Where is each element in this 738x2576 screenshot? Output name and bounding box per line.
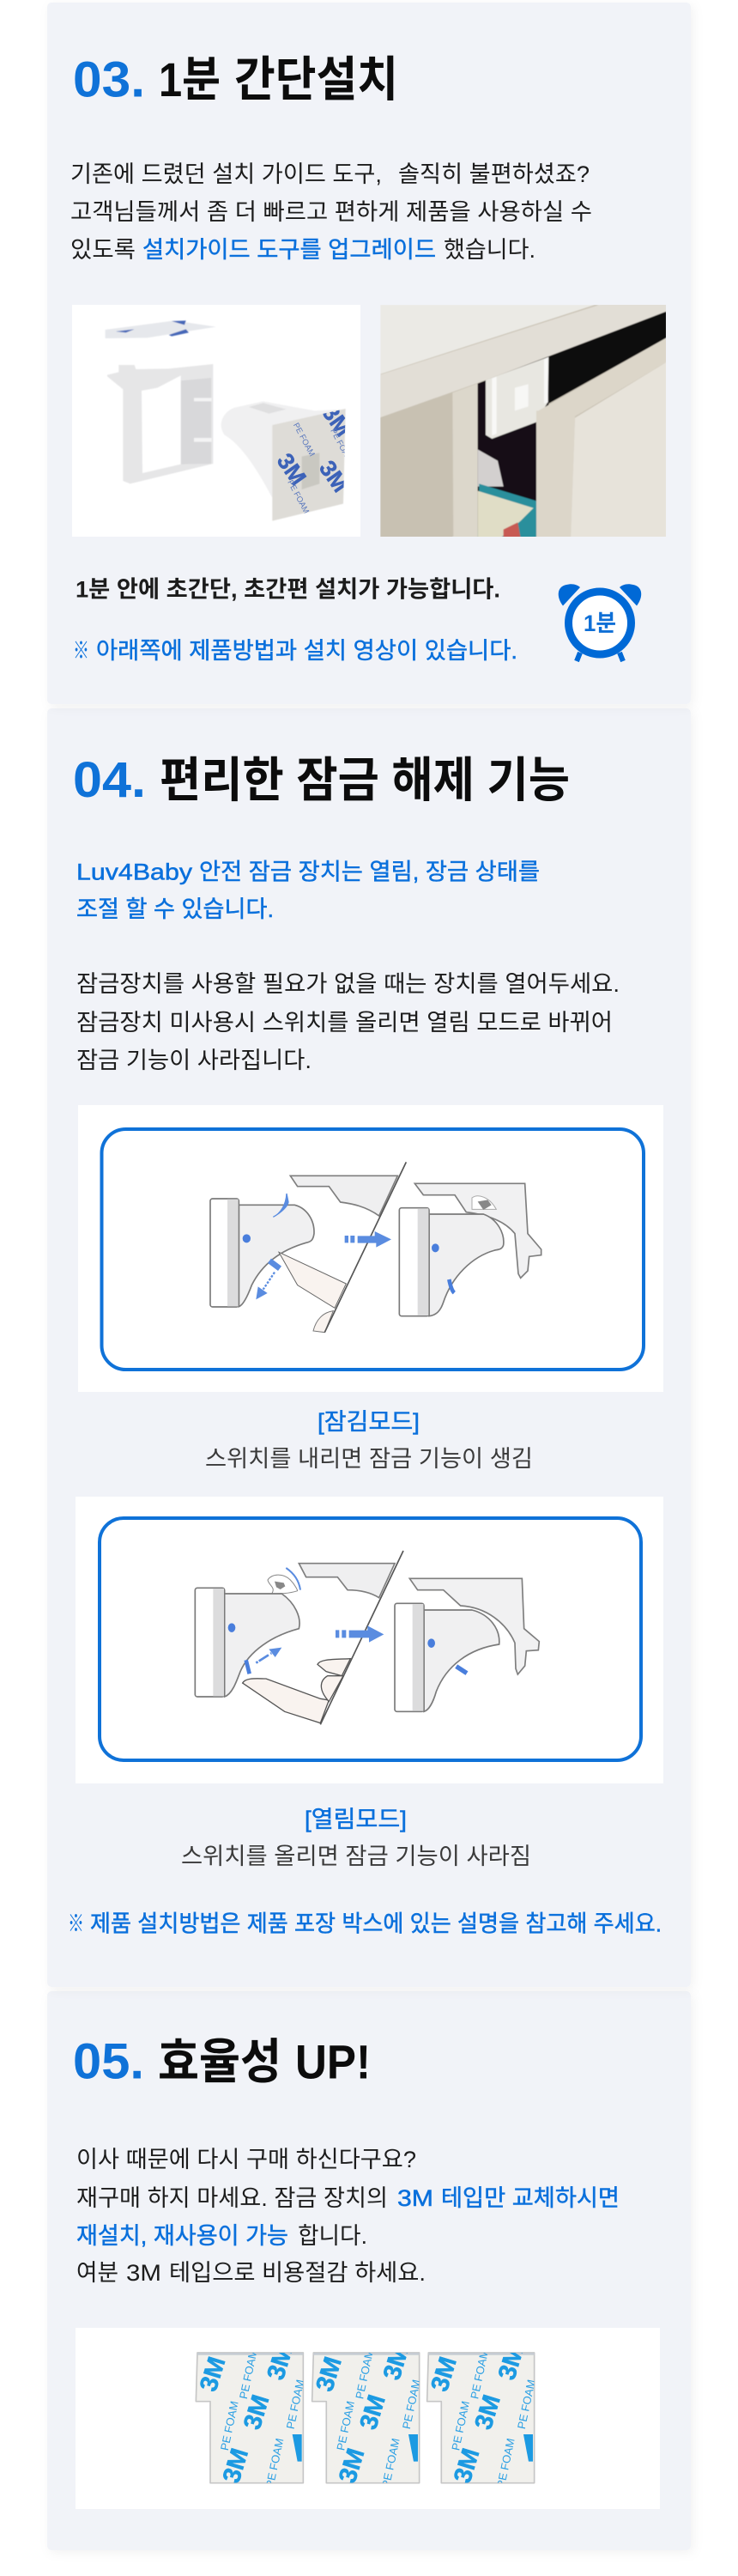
caption: open mode: [열림모드] [305,1807,407,1832]
tape 2: PE FOAM [334,2400,357,2451]
illustration: lock mode [78,1105,663,1392]
text: package instructions note: ※ [68,1911,84,1937]
tape 1: PE FOAM [237,2348,260,2400]
tape 1: 3M [239,2391,275,2433]
text: 1 minute callout: 1분 안에 초간단, 초간편 설치가 가능합니다. [76,577,500,603]
tape 2: 3M [378,2342,414,2384]
text block: reuse description: 재설치, 재사용이 가능 [76,2223,288,2249]
text block: intro: 솔직히 불편하셨죠? [398,161,590,187]
3M tape marks: 3M [314,456,354,497]
tape 1: PE FOAM [284,2379,306,2430]
tape 3 [426,2352,535,2483]
3M tape marks: 3M [272,449,312,489]
tape 3: 3M [449,2445,485,2487]
text: installation video note: 아래쪽에 제품방법과 설치 영상이 있습니다. [96,638,517,664]
text block: reuse description: 합니다. [298,2223,367,2249]
caption: lock mode: [잠김모드] [318,1409,420,1435]
icon: alarm clock 1 minute: 1분 [584,611,616,636]
image: lock installed on cabinet [378,303,667,538]
heading: 05 efficiency up: 효율성 [158,2035,281,2088]
3M tape marks [278,410,345,513]
tape 2: 3M [334,2445,370,2487]
tape 3: PE FOAM [494,2437,517,2488]
text block: reuse description [76,2147,620,2286]
image: three 3M tapes [76,2328,660,2509]
heading: 03 1-minute install [73,52,398,108]
text block: reuse description: 3M [397,2185,433,2211]
heading: 03 1-minute install: 03. [73,52,145,108]
3M tape marks: PE FOAM [328,427,354,464]
tape 1: 3M [218,2445,254,2487]
text block: intro: 설치가이드 도구를 업그레이드 [142,237,436,263]
tape 3: 3M [469,2391,506,2433]
caption: lock mode: 스위치를 내리면 잠금 기능이 생김 [205,1446,533,1472]
text: package instructions note: 제품 설치방법은 제품 포장 박스에 있는 설명을 참고해 주세요. [90,1911,662,1937]
text block: blue lead: 안전 잠금 장치는 열림, 장금 상태를 [199,859,540,884]
icon: alarm clock 1 minute [559,584,641,661]
image: lock parts with 3M tape [72,305,360,537]
tape 3: PE FOAM [468,2348,491,2400]
heading: 05 efficiency up: 05. [73,2033,144,2090]
section 05 [73,2033,660,2509]
text: installation video note: ※ [73,638,89,664]
3M tape marks: 3M [317,400,356,441]
tape 2: 3M [354,2391,391,2433]
tape 3: 3M [493,2342,529,2384]
illustration: open mode [76,1497,663,1783]
heading: 05 efficiency up: UP! [295,2035,371,2088]
panel: 04 unlock feature background [47,708,691,1987]
text block: intro [70,161,592,263]
caption: lock mode [205,1409,533,1472]
caption: open mode [181,1807,531,1869]
tape 1: PE FOAM [218,2400,241,2451]
tape 2 [311,2352,420,2483]
text block: blue lead: 조절 할 수 있습니다. [76,896,274,922]
text block: description [76,971,620,1073]
heading: 04 easy unlock: 편리한 잠금 해제 기능 [160,753,570,807]
heading: 04 easy unlock: 04. [73,752,146,808]
section 03 [70,52,667,664]
text block: reuse description: 테입만 교체하시면 [441,2185,620,2211]
tape 3: PE FOAM [515,2379,538,2430]
text block: description: 잠금장치를 사용할 필요가 없을 때는 장치를 열어두세요. [76,971,620,997]
panel: 05 efficiency background [47,1991,691,2550]
text block: reuse description: 여분 [76,2260,118,2286]
text block: blue lead: Luv4Baby [76,859,193,884]
text block: intro: 있도록 [70,237,136,263]
tape 1: 3M [195,2354,232,2395]
section 04 [68,752,663,1937]
text block: intro: 기존에 드렸던 설치 가이드 도구, [70,161,382,187]
caption: open mode: 스위치를 올리면 잠금 기능이 사라짐 [181,1844,531,1869]
text block: reuse description: 이사 때문에 다시 구매 하신다구요? [76,2147,416,2172]
tape 2: PE FOAM [353,2348,376,2400]
text block: intro: 했습니다. [444,237,535,263]
tape 1 [196,2352,304,2483]
heading: 03 1-minute install: 1분 [159,52,221,106]
3M tape marks: PE FOAM [291,422,317,459]
text block: reuse description: 재구매 하지 마세요. 잠금 장치의 [76,2185,388,2211]
heading: 05 efficiency up [73,2033,371,2090]
text block: reuse description: 테입으로 비용절감 하세요. [169,2260,426,2286]
tape 3: PE FOAM [449,2400,472,2451]
3M tape marks: PE FOAM [285,478,311,515]
panel: 03 install background [47,3,691,704]
tape 2: 3M [311,2354,348,2395]
text block: intro: 고객님들께서 좀 더 빠르고 편하게 제품을 사용하실 수 [70,199,592,225]
text block: description: 잠금 기능이 사라집니다. [76,1048,312,1073]
tape 3: 3M [426,2354,463,2395]
tape 2: PE FOAM [379,2437,402,2488]
tape 1: 3M [262,2342,299,2384]
tape 1: PE FOAM [263,2437,286,2488]
tape 2: PE FOAM [400,2379,423,2430]
text block: description: 잠금장치 미사용시 스위치를 올리면 열림 모드로 바뀌어 [76,1010,613,1036]
text block: blue lead [76,859,540,922]
text block: reuse description: 3M [126,2260,161,2286]
heading: 03 1-minute install: 간단설치 [234,52,398,106]
